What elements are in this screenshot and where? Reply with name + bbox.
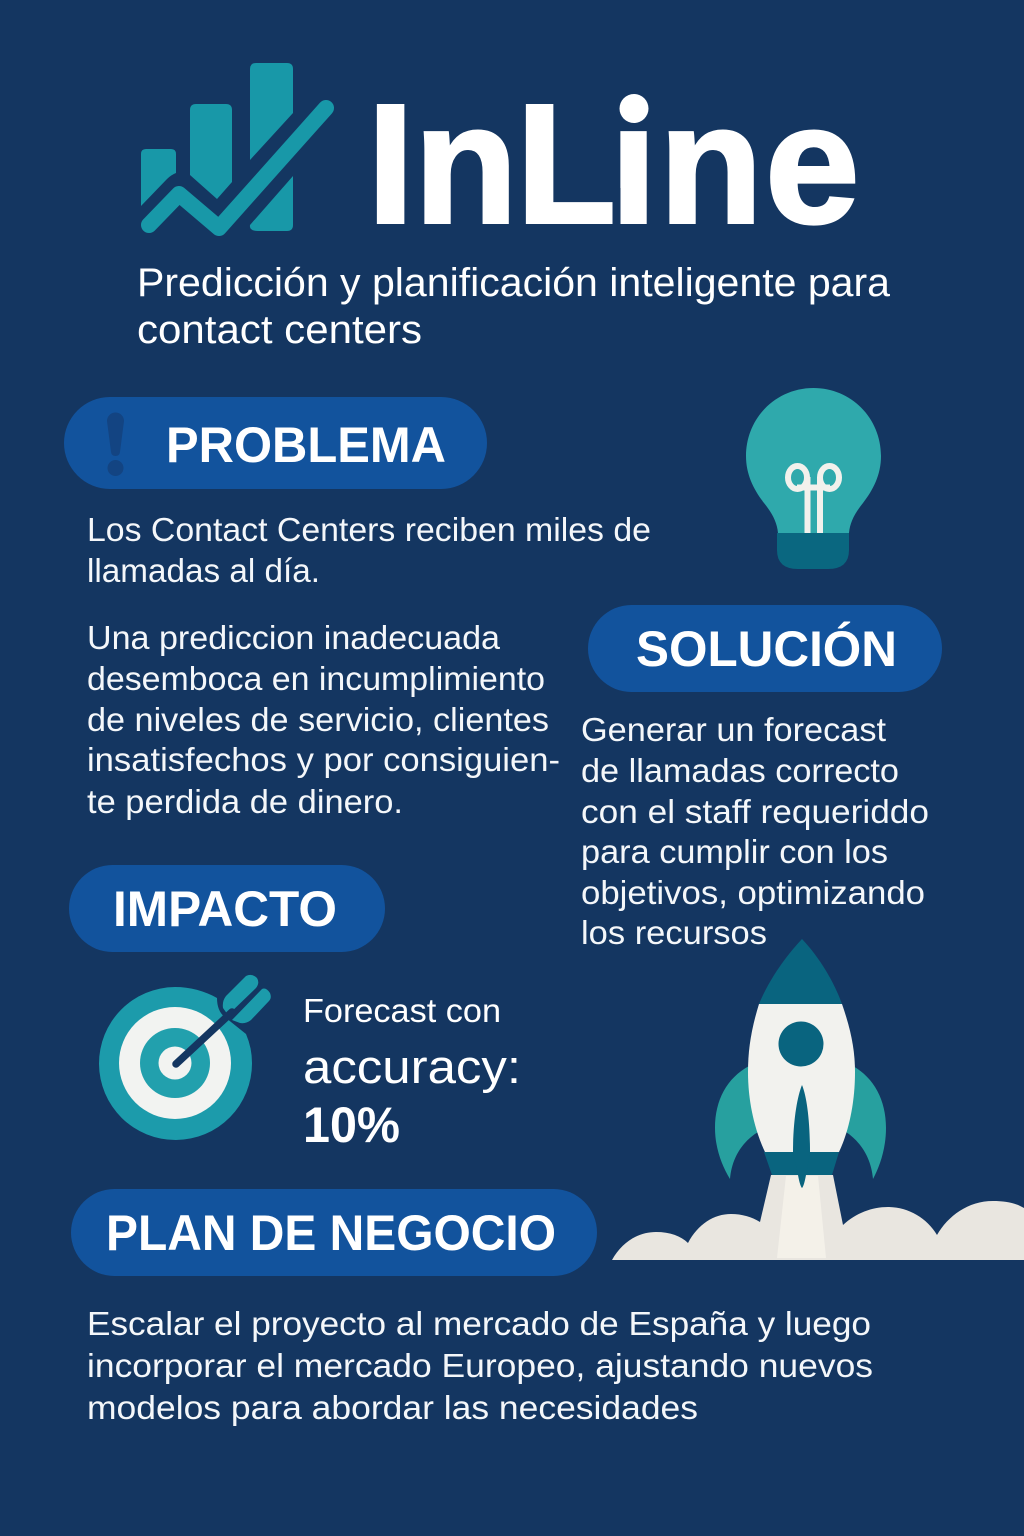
text block: problema detail: te perdida de dinero. (87, 783, 403, 820)
panel: problema heading pill: PROBLEMA (166, 417, 446, 473)
panel: plan de negocio heading pill (71, 1189, 597, 1276)
text block: forecast accuracy stat (303, 992, 521, 1153)
nozzle band (764, 1152, 839, 1175)
text block: solucion: Generar un forecast (581, 711, 886, 748)
text block: problema detail: Una prediccion inadecuada (87, 619, 501, 656)
panel: plan de negocio heading pill: PLAN DE NEGOCIO (106, 1205, 556, 1261)
text block: forecast accuracy stat: Forecast con (303, 992, 501, 1029)
text block: problema detail (87, 619, 560, 820)
logo icon: bars with trend check (141, 63, 326, 231)
icon: rocket launching from clouds (612, 939, 1024, 1260)
icon: target with arrow (99, 975, 271, 1140)
text block: solucion: los recursos (581, 914, 767, 951)
text block: plan de negocio: modelos para abordar las necesidades (87, 1389, 698, 1426)
panel: impacto heading pill: IMPACTO (113, 881, 337, 937)
icon: exclamation mark (107, 412, 124, 476)
subtitle: Predicción y planificación inteligente para (137, 261, 891, 305)
icon: light bulb (746, 388, 881, 569)
panel: impacto heading pill (69, 865, 385, 952)
panel: solucion heading pill: SOLUCIÓN (636, 621, 897, 677)
text block: plan de negocio: incorporar el mercado Europeo, ajustando nuevos (87, 1347, 873, 1384)
text block: forecast accuracy stat: accuracy: (303, 1040, 521, 1093)
text block: forecast accuracy stat: 10% (303, 1097, 400, 1153)
text block: problema intro: Los Contact Centers reciben miles de (87, 511, 651, 548)
text block: plan de negocio (87, 1305, 873, 1426)
clouds (612, 1175, 1024, 1260)
nose cone (759, 939, 842, 1004)
logo wordmark: InLine (367, 70, 860, 260)
panel: solucion heading pill (588, 605, 942, 692)
text block: plan de negocio: Escalar el proyecto al mercado de España y luego (87, 1305, 871, 1342)
text block: solucion: objetivos, optimizando (581, 874, 925, 911)
text block: problema intro (87, 511, 651, 589)
text block: solucion: para cumplir con los (581, 833, 888, 870)
text block: problema detail: de niveles de servicio, clientes (87, 701, 549, 738)
panel: problema heading pill (64, 397, 487, 489)
text block: solucion: con el staff requeriddo (581, 793, 929, 830)
subtitle (137, 261, 891, 352)
porthole (778, 1022, 824, 1066)
text block: problema detail: insatisfechos y por consiguien- (87, 741, 560, 778)
fins (715, 1066, 758, 1179)
text block: solucion: de llamadas correcto (581, 752, 899, 789)
text block: problema intro: llamadas al día. (87, 552, 320, 589)
body (748, 1004, 855, 1152)
center fin (793, 1085, 810, 1188)
text block: problema detail: desemboca en incumplimiento (87, 660, 545, 697)
text block: solucion (581, 711, 929, 951)
subtitle: contact centers (137, 308, 422, 352)
